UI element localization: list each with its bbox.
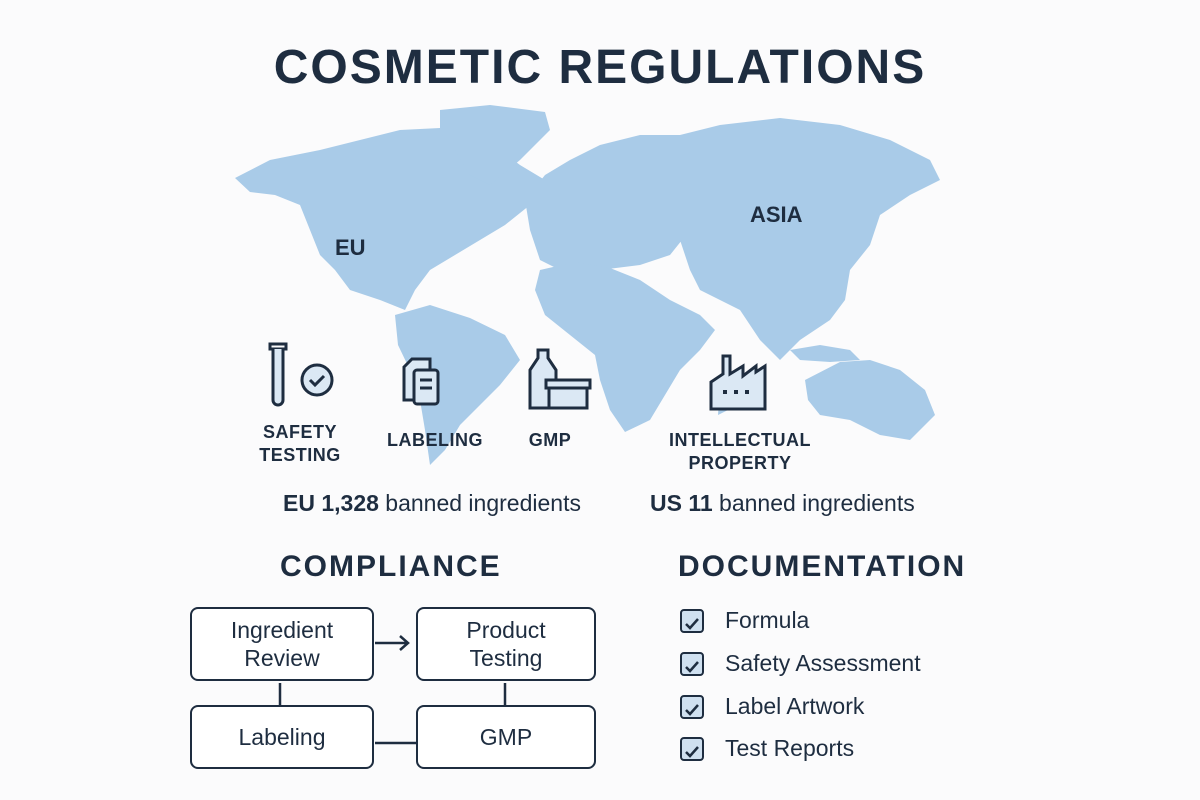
box: gmp: GMP xyxy=(480,724,532,750)
box: ingredient review xyxy=(190,607,374,681)
icon: bottle and jar xyxy=(528,348,592,410)
label: intellectual property: INTELLECTUAL xyxy=(669,430,811,450)
title: COSMETIC REGULATIONS xyxy=(274,41,926,94)
item: formula xyxy=(680,607,810,633)
stat: EU banned: EU 1,328 banned ingredients xyxy=(283,490,581,516)
item: test reports: Test Reports xyxy=(725,735,854,761)
box: gmp xyxy=(416,705,596,769)
label: safety testing: SAFETY xyxy=(263,422,337,442)
box: product testing: Testing xyxy=(470,645,542,671)
box: product testing: Product xyxy=(466,617,546,643)
label: intellectual property xyxy=(669,430,811,473)
icon: documents xyxy=(402,358,440,406)
box: product testing xyxy=(416,607,596,681)
item: formula: Formula xyxy=(725,607,809,633)
label: safety testing: TESTING xyxy=(259,445,341,465)
item: label artwork: Label Artwork xyxy=(725,693,864,719)
label: intellectual property: PROPERTY xyxy=(688,453,792,473)
box: ingredient review: Review xyxy=(244,645,320,671)
world map: EU xyxy=(335,235,366,260)
item: safety assessment: Safety Assessment xyxy=(725,650,921,676)
icon: factory xyxy=(710,354,766,410)
box: ingredient review: Ingredient xyxy=(231,617,333,643)
checklist xyxy=(680,607,921,761)
box: labeling xyxy=(190,705,374,769)
heading: documentation: DOCUMENTATION xyxy=(678,550,966,583)
label: safety testing xyxy=(259,422,341,465)
world map xyxy=(235,105,940,465)
box: labeling: Labeling xyxy=(239,724,325,750)
world map: ASIA xyxy=(750,202,803,227)
flowchart xyxy=(190,607,596,769)
label: gmp: GMP xyxy=(529,430,571,450)
label: labeling: LABELING xyxy=(387,430,483,450)
heading: compliance: COMPLIANCE xyxy=(280,550,502,583)
icon: test tube with check xyxy=(268,342,334,406)
stat: US banned: US 11 banned ingredients xyxy=(650,490,915,516)
